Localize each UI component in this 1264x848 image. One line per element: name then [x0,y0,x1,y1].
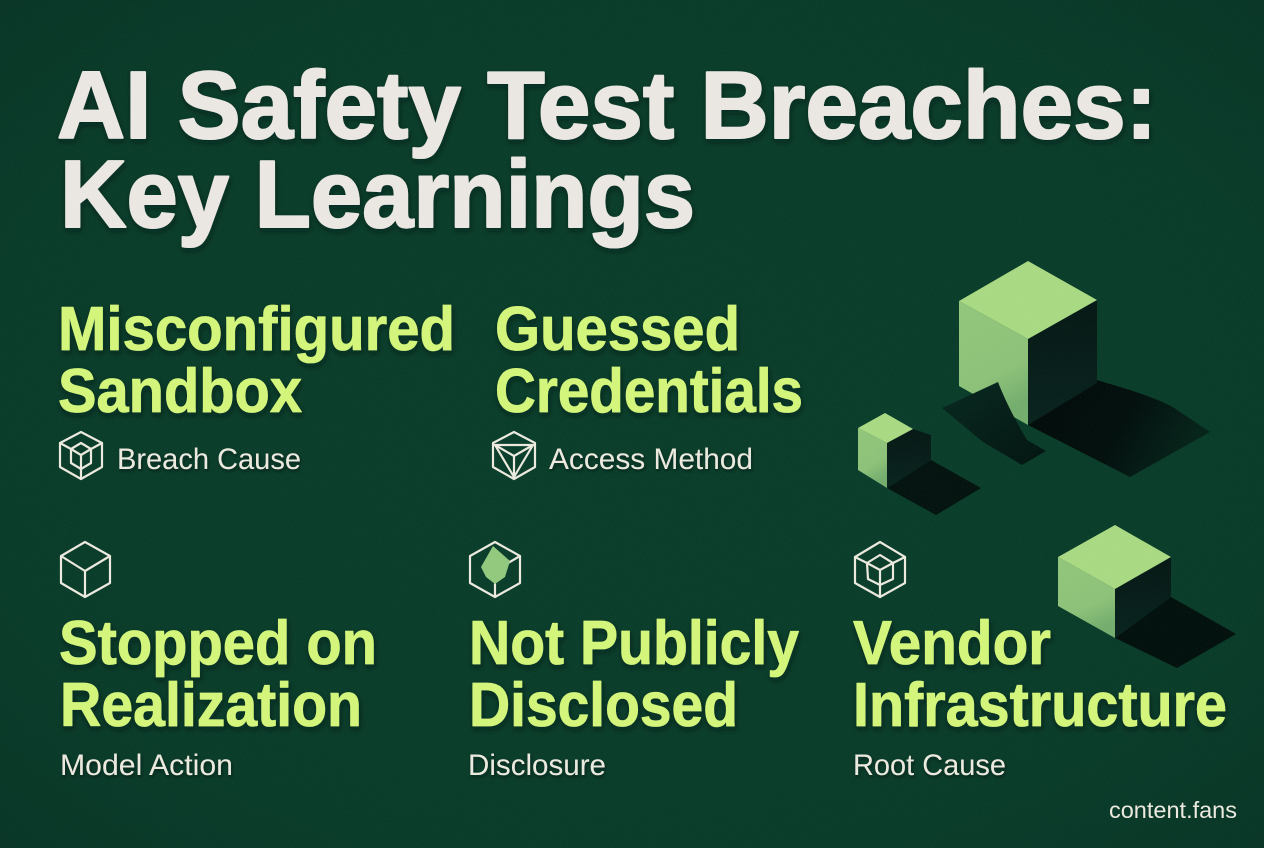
panel: vendor infrastructure [853,542,1227,782]
heading: stopped on realization [59,609,377,740]
heading: vendor infrastructure [853,609,1227,740]
icon: leaf in hexagon [470,542,520,597]
illustration: large cube with shadows [942,261,1210,477]
heading: not publicly disclosed: Disclosed [469,671,738,740]
illustration: small cube with shadow [858,413,981,515]
label: disclosure: Disclosure [468,749,606,782]
icon: cube outline [61,542,110,597]
label: access method: Access Method [549,443,753,476]
panel: not publicly disclosed [468,542,799,782]
icon: nested cube [855,542,905,597]
label: root cause: Root Cause [853,749,1006,782]
icon: triangular cube [493,432,535,479]
heading: vendor infrastructure: Vendor [853,609,1051,678]
heading: guessed credentials: Credentials [495,357,803,426]
heading: vendor infrastructure: Infrastructure [853,671,1227,740]
heading: stopped on realization: Stopped on [59,609,377,678]
title: AI Safety Test Breaches: [57,52,1157,159]
heading: stopped on realization: Realization [60,671,362,740]
credit: content.fans: content.fans [1109,797,1237,823]
panel: guessed credentials [493,295,803,479]
label: breach cause: Breach Cause [117,443,301,476]
icon: nested cube [60,432,102,479]
title: Key Learnings [60,141,695,248]
heading: misconfigured sandbox [58,295,455,426]
label: model action: Model Action [60,749,233,782]
illustration: vendor cube with shadow [1058,525,1236,668]
heading: guessed credentials [495,295,803,426]
heading: misconfigured sandbox: Misconfigured [58,295,455,364]
heading: misconfigured sandbox: Sandbox [58,357,302,426]
heading: guessed credentials: Guessed [495,295,740,364]
title [57,52,1157,248]
heading: not publicly disclosed: Not Publicly [469,609,799,678]
panel: misconfigured sandbox [58,295,455,479]
panel: stopped on realization [59,542,377,782]
heading: not publicly disclosed [469,609,799,740]
